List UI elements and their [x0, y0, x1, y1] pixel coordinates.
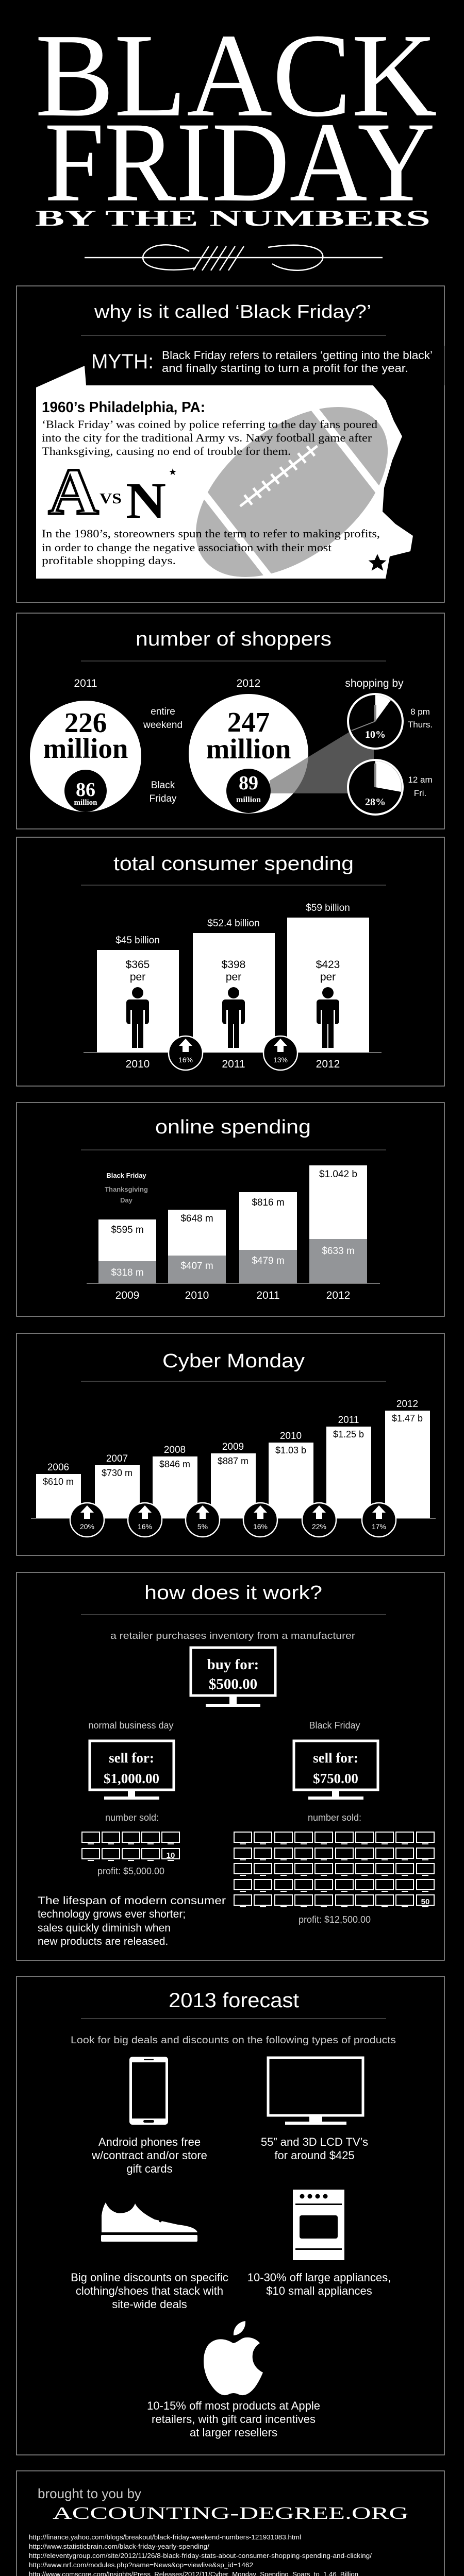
pie 28%: [348, 760, 403, 815]
label: number sold: number sold:: [105, 1812, 159, 1823]
bar chart: cyber monday: $610 m: [43, 1477, 74, 1487]
heading: number of shoppers: number of shoppers: [136, 629, 332, 650]
myth tab: MYTH:: [91, 350, 154, 373]
title: BY THE NUMBERS: [35, 206, 430, 231]
text: lifespan: [38, 1895, 226, 1947]
callout wedge: [270, 724, 374, 793]
panel: total consumer spending: [16, 837, 444, 1086]
labels: weekend / black friday: Black: [151, 780, 175, 791]
profit normal: profit: $5,000.00: [97, 1866, 164, 1876]
circle 2011: million: [74, 799, 97, 807]
arrows: growth: 16%: [253, 1522, 268, 1531]
panel: cyber monday: [16, 1333, 444, 1555]
arrows: growth: 20%: [80, 1522, 94, 1531]
title: [35, 9, 437, 231]
pie 10%: [348, 694, 403, 749]
label: normal / black friday: Black Friday: [309, 1720, 360, 1731]
icon: A vs N: N: [126, 472, 166, 529]
year labels: shopping by: [345, 677, 404, 689]
logo: accounting-degree.org: ACCOUNTING-DEGREE.ORG: [53, 2504, 408, 2523]
bar chart: cyber monday: 2010: [280, 1431, 302, 1442]
text: 1960s philadelphia: Thanksgiving, causing no end of trouble for them.: [42, 445, 291, 457]
bar chart: spending: $59 billion: [306, 903, 350, 913]
label: number sold: number sold:: [308, 1812, 361, 1823]
bar chart: cyber monday: $1.47 b: [392, 1413, 423, 1423]
bar chart: cyber monday: 2011: [338, 1415, 359, 1426]
bar chart: spending: 2010: [126, 1058, 150, 1070]
icon: stove: [293, 2190, 344, 2260]
text: apple: 10-15% off most products at Apple: [147, 2399, 320, 2412]
label: number sold: [105, 1812, 361, 1823]
circle 2012: million: [206, 733, 291, 765]
legend: Black Friday: [106, 1172, 146, 1179]
bar chart: online: $407 m: [180, 1261, 213, 1272]
labels: weekend / black friday: Friday: [150, 793, 177, 804]
bar chart: cyber monday: 2006: [47, 1462, 69, 1473]
sources list: [29, 2533, 432, 2576]
arrows: growth: 17%: [372, 1522, 386, 1531]
circle 2012: million: [236, 795, 261, 804]
circle 2012: 89: [239, 772, 258, 794]
icon: A vs N: ★: [169, 467, 177, 477]
sources list: http://eleventygroup.com/site/2012/11/26/8-black-friday-stats-about-consumer-shopping-spending-and-clicking/: [29, 2552, 372, 2560]
icon: tv: [268, 2058, 363, 2125]
bar chart: spending: $423: [316, 959, 340, 971]
myth tab: [86, 346, 444, 385]
text: lifespan: technology grows ever shorter;: [38, 1908, 186, 1920]
bar chart: cyber monday: $730 m: [102, 1468, 132, 1478]
icon: shoe: [101, 2202, 197, 2242]
text: 1980s: In the 1980’s, storeowners spun the term to refer to making profits,: [42, 527, 380, 540]
bar chart: spending: $365: [126, 959, 150, 971]
heading: why is it called: why is it called ‘Black Friday?’: [94, 301, 371, 322]
text: apple: retailers, with gift card incentives: [152, 2413, 316, 2426]
bar chart: cyber monday: 2012: [396, 1399, 418, 1410]
text: shoes: Big online discounts on specific: [71, 2271, 228, 2284]
legend: Thanksgiving: [105, 1185, 148, 1193]
heading: total consumer spending: total consumer spending: [113, 853, 354, 875]
text: 1960s philadelphia: [42, 399, 377, 457]
icon: monitor buy: buy for:: [207, 1656, 259, 1673]
bar chart: cyber monday: 2008: [164, 1445, 186, 1455]
bar chart: cyber monday: [31, 1399, 436, 1518]
labels: weekend / black friday: entire: [151, 706, 175, 717]
bar chart: spending: 2012: [316, 1058, 340, 1070]
grid: 50 sold: [234, 1832, 434, 1907]
bar chart: cyber monday: 2007: [106, 1453, 128, 1464]
bar chart: online: $318 m: [111, 1267, 144, 1278]
pie 28%: 28%: [365, 796, 386, 808]
text: 1960s philadelphia: 1960’s Philadelphia, PA:: [42, 399, 205, 416]
text: apple: at larger resellers: [190, 2426, 277, 2439]
text: 1980s: profitable shopping days.: [42, 554, 176, 567]
icon: monitor buy: [191, 1648, 275, 1707]
panel: 2013 forecast: [16, 1976, 444, 2455]
bar chart: spending: 2011: [222, 1058, 245, 1070]
label: normal / black friday: normal business day: [88, 1720, 174, 1731]
label: normal / black friday: [88, 1720, 360, 1731]
title: BLACK: [35, 9, 437, 142]
bar chart: online: $479 m: [252, 1256, 285, 1266]
bar chart: spending: per: [226, 971, 241, 983]
bar chart: cyber monday: $1.25 b: [333, 1429, 364, 1439]
arrows: growth: 16%: [138, 1522, 152, 1531]
ornament: [85, 245, 383, 270]
icon: football: [196, 407, 388, 577]
text: 1980s: in order to change the negative association with their most: [42, 541, 332, 554]
circle 2011: million: [43, 733, 128, 764]
year labels: 2012: [237, 677, 260, 689]
bar chart: cyber monday: $1.03 b: [275, 1445, 306, 1455]
year labels: 2011: [74, 677, 97, 689]
text: appliances: $10 small appliances: [266, 2284, 372, 2297]
icon: apple: [204, 2321, 263, 2395]
panel: how does it work: [16, 1572, 444, 1960]
arrow: 16%: 16%: [178, 1056, 193, 1064]
panel: online spending: [16, 1103, 444, 1316]
bar chart: online: 2011: [256, 1290, 280, 1301]
text: 1960s philadelphia: into the city for the traditional Army vs. Navy football game after: [42, 431, 372, 444]
arrow: 16%: [169, 1036, 203, 1070]
sources list: http://www.nrf.com/modules.php?name=News&op=viewlive&sp_id=1462: [29, 2561, 253, 2569]
pie labels: 12 am: [408, 775, 433, 785]
panel: why is it called Black Friday: [16, 286, 444, 611]
myth tab: Black Friday refers to retailers ‘getting into the black’: [162, 349, 433, 362]
pie labels: [408, 707, 433, 798]
text: brought to you by: brought to you by: [38, 2486, 141, 2501]
subtitle: Look for big deals and discounts on the following types of products: [71, 2035, 396, 2046]
icon: monitor normal: $1,000.00: [104, 1771, 159, 1786]
icon: star outline: [367, 553, 388, 572]
pie labels: Fri.: [414, 788, 426, 798]
bar chart: spending: per: [130, 971, 145, 983]
text: tvs: [261, 2136, 368, 2162]
text: phones: [91, 2136, 207, 2175]
icon: phone: [129, 2057, 168, 2125]
icon: monitor normal: [90, 1741, 174, 1800]
text: lifespan: sales quickly diminish when: [38, 1922, 171, 1934]
bar chart: online: $633 m: [322, 1246, 355, 1257]
bar chart: online: $648 m: [180, 1213, 213, 1224]
text: 1980s: [42, 527, 380, 567]
text: apple: [147, 2399, 320, 2439]
icon: A vs N: VS: [100, 491, 122, 507]
map: pennsylvania shape: [36, 366, 413, 579]
legend: [105, 1172, 148, 1204]
panel: credits: [16, 2471, 444, 2576]
bar chart: spending: $45 billion: [115, 935, 160, 946]
pie 10%: 10%: [365, 729, 386, 740]
text: tvs: for around $425: [274, 2149, 355, 2162]
arrows: growth: [70, 1503, 396, 1537]
circle 2011: 226: [64, 707, 107, 738]
arrows: growth: 5%: [197, 1522, 208, 1531]
grid: 10 sold: 10: [167, 1851, 175, 1860]
bar chart: cyber monday: $887 m: [218, 1456, 248, 1466]
bar chart: spending: [84, 903, 382, 1070]
text: lifespan: The lifespan of modern consumer: [38, 1895, 226, 1907]
legend: Day: [120, 1196, 133, 1204]
bar chart: online: $595 m: [111, 1225, 144, 1235]
text: lifespan: new products are released.: [38, 1936, 168, 1947]
text: 1960s philadelphia: ‘Black Friday’ was coined by police referring to the day fans poured: [42, 418, 377, 431]
sources list: http://www.statisticbrain.com/black-friday-yearly-spending/: [29, 2543, 209, 2550]
subtitle: a retailer purchases inventory from a manufacturer: [110, 1631, 355, 1641]
text: phones: Android phones free: [98, 2136, 201, 2148]
panel: number of shoppers: [16, 613, 444, 829]
icon: A vs N: A: [48, 455, 98, 528]
heading: cyber monday: Cyber Monday: [162, 1350, 305, 1372]
bar chart: online: $816 m: [252, 1197, 285, 1208]
bar chart: online: 2010: [185, 1290, 209, 1301]
icon: monitor black friday: [294, 1741, 378, 1800]
bar chart: cyber monday: 2009: [222, 1442, 244, 1452]
bar chart: spending: $52.4 billion: [207, 918, 260, 929]
profit black friday: profit: $12,500.00: [299, 1914, 371, 1925]
icon: monitor black friday: $750.00: [313, 1771, 358, 1786]
icon: monitor black friday: sell for:: [313, 1750, 358, 1766]
icon: monitor buy: $500.00: [209, 1676, 257, 1692]
text: phones: gift cards: [126, 2162, 173, 2175]
text: appliances: [247, 2271, 391, 2297]
bar chart: online: $1.042 b: [319, 1169, 357, 1180]
circle 2012: 247: [227, 706, 270, 738]
text: tvs: 55” and 3D LCD TV’s: [261, 2136, 368, 2148]
labels: weekend / black friday: [143, 706, 183, 804]
circle 2011: 86: [76, 779, 95, 801]
myth tab: and finally starting to turn a profit for the year.: [162, 362, 408, 375]
bar chart: online: 2012: [326, 1290, 350, 1301]
bar chart: online: 2009: [115, 1290, 139, 1301]
heading: 2013 forecast: 2013 forecast: [169, 1989, 299, 2012]
bar chart: cyber monday: $846 m: [159, 1459, 190, 1469]
year labels: [74, 677, 404, 689]
heading: online spending: online spending: [155, 1116, 311, 1138]
sources list: http://finance.yahoo.com/blogs/breakout/black-friday-weekend-numbers-121931083.html: [29, 2533, 301, 2541]
title: FRIDAY: [44, 99, 435, 226]
icon: monitor normal: sell for:: [109, 1750, 154, 1766]
icon: A vs N: [48, 455, 177, 529]
arrows: growth: 22%: [312, 1522, 326, 1531]
grid: 10 sold: [82, 1832, 179, 1861]
text: shoes: clothing/shoes that stack with: [76, 2284, 223, 2297]
grid: 50 sold: 50: [421, 1897, 429, 1906]
circle 2012: [189, 694, 374, 814]
text: shoes: site-wide deals: [112, 2298, 187, 2311]
pie labels: Thurs.: [408, 720, 433, 730]
labels: weekend / black friday: weekend: [143, 720, 183, 731]
circle 2011: [30, 701, 141, 812]
bar chart: spending: per: [320, 971, 336, 983]
heading: how does it work: how does it work?: [144, 1582, 322, 1604]
arrow: 13%: 13%: [273, 1056, 288, 1064]
text: appliances: 10-30% off large appliances,: [247, 2271, 391, 2284]
pie labels: 8 pm: [410, 707, 430, 717]
bar chart: spending: $398: [222, 959, 245, 971]
text: phones: w/contract and/or store: [91, 2149, 207, 2162]
bar chart: online: [87, 1165, 380, 1301]
arrow: 13%: [263, 1036, 297, 1070]
text: shoes: [71, 2271, 228, 2311]
